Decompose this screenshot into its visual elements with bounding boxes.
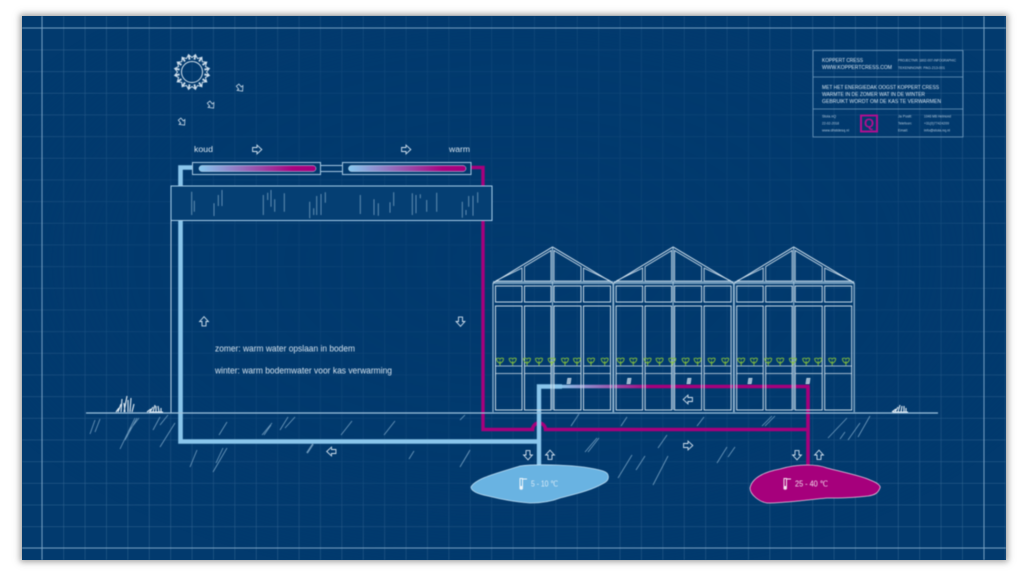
project name: KOPPERT CRESS bbox=[822, 58, 863, 64]
contact values: +31(0)77424209 bbox=[924, 122, 949, 126]
cold water pipe bbox=[180, 168, 538, 442]
greenhouse bay 1 bbox=[493, 247, 613, 412]
solar collector left bbox=[192, 162, 320, 174]
grass tuft middle bbox=[147, 405, 163, 412]
title block bbox=[813, 50, 963, 137]
project numbers bbox=[898, 58, 956, 70]
studio details: 22-02-2018 bbox=[822, 122, 839, 126]
description bbox=[822, 85, 941, 105]
arrows: sunlight bbox=[177, 83, 245, 128]
contact labels: Telefoon: bbox=[898, 122, 912, 126]
soil mark bbox=[307, 444, 313, 453]
icon: sun bbox=[175, 55, 209, 89]
studio details bbox=[822, 114, 849, 132]
greenhouse bay 3 bbox=[734, 247, 854, 412]
reservoir: warm bbox=[750, 465, 880, 503]
grass tuft left bbox=[116, 396, 134, 412]
logo: Q bbox=[864, 116, 874, 130]
flow arrows bbox=[200, 145, 823, 460]
label: warm: warm bbox=[448, 144, 470, 154]
project numbers: PROJECTNR: 1802-007-INFOGRAPHIC bbox=[898, 58, 956, 62]
title block frame bbox=[813, 50, 963, 137]
description: MET HET ENERGIEDAK OOGST KOPPERT CRESS bbox=[822, 85, 939, 91]
project name: WWW.KOPPERTCRESS.COM bbox=[822, 65, 892, 71]
label: 5-10: 5 - 10 ℃ bbox=[531, 480, 558, 488]
contact labels: Email: bbox=[898, 128, 908, 132]
description: GEBRUIKT WORDT OM DE KAS TE VERWARMEN bbox=[822, 99, 941, 105]
contact values: 1046 MB Helmond bbox=[924, 114, 951, 118]
contact values: info@stola.nq.nl bbox=[924, 128, 950, 132]
greenhouse bay 2 bbox=[614, 247, 734, 412]
thermometer icon cold bbox=[519, 478, 527, 490]
project numbers: TEKENINGNR: PAG-213-001 bbox=[898, 66, 945, 70]
project name bbox=[822, 58, 892, 71]
studio details: Stola.nQ bbox=[822, 114, 836, 118]
label: 25-40: 25 - 40 ℃ bbox=[795, 480, 828, 488]
greenhouse bbox=[493, 247, 854, 412]
heating pipe in greenhouse bbox=[539, 386, 808, 466]
contact values bbox=[924, 114, 951, 132]
thermometer icon warm bbox=[783, 478, 791, 490]
studio details: www.dhstdesq.nl bbox=[822, 128, 849, 132]
logo bbox=[861, 116, 877, 132]
winter text: winter: warm bodemwater voor kas verwarming bbox=[214, 366, 392, 376]
roof slab bbox=[171, 186, 492, 220]
summer text: zomer: warm water opslaan in bodem bbox=[215, 344, 355, 354]
solar collector right bbox=[342, 162, 471, 174]
soil hatching bbox=[90, 414, 870, 485]
contact labels bbox=[898, 114, 912, 132]
warm water pipe bbox=[471, 168, 808, 430]
building wall lines bbox=[170, 220, 172, 413]
heaters bbox=[566, 378, 810, 384]
ground line bbox=[86, 412, 938, 414]
collector connector bbox=[320, 166, 342, 172]
description: WARMTE IN DE ZOMER WAT IN DE WINTER bbox=[822, 92, 925, 98]
reservoir: cold bbox=[471, 465, 608, 503]
contact labels: Ja Postt: bbox=[898, 114, 912, 118]
label: koud: koud bbox=[194, 144, 213, 154]
cold supply riser bbox=[539, 386, 808, 466]
grass tuft right bbox=[892, 405, 908, 412]
energy roof panels bbox=[171, 162, 492, 220]
explanation text bbox=[214, 344, 392, 376]
